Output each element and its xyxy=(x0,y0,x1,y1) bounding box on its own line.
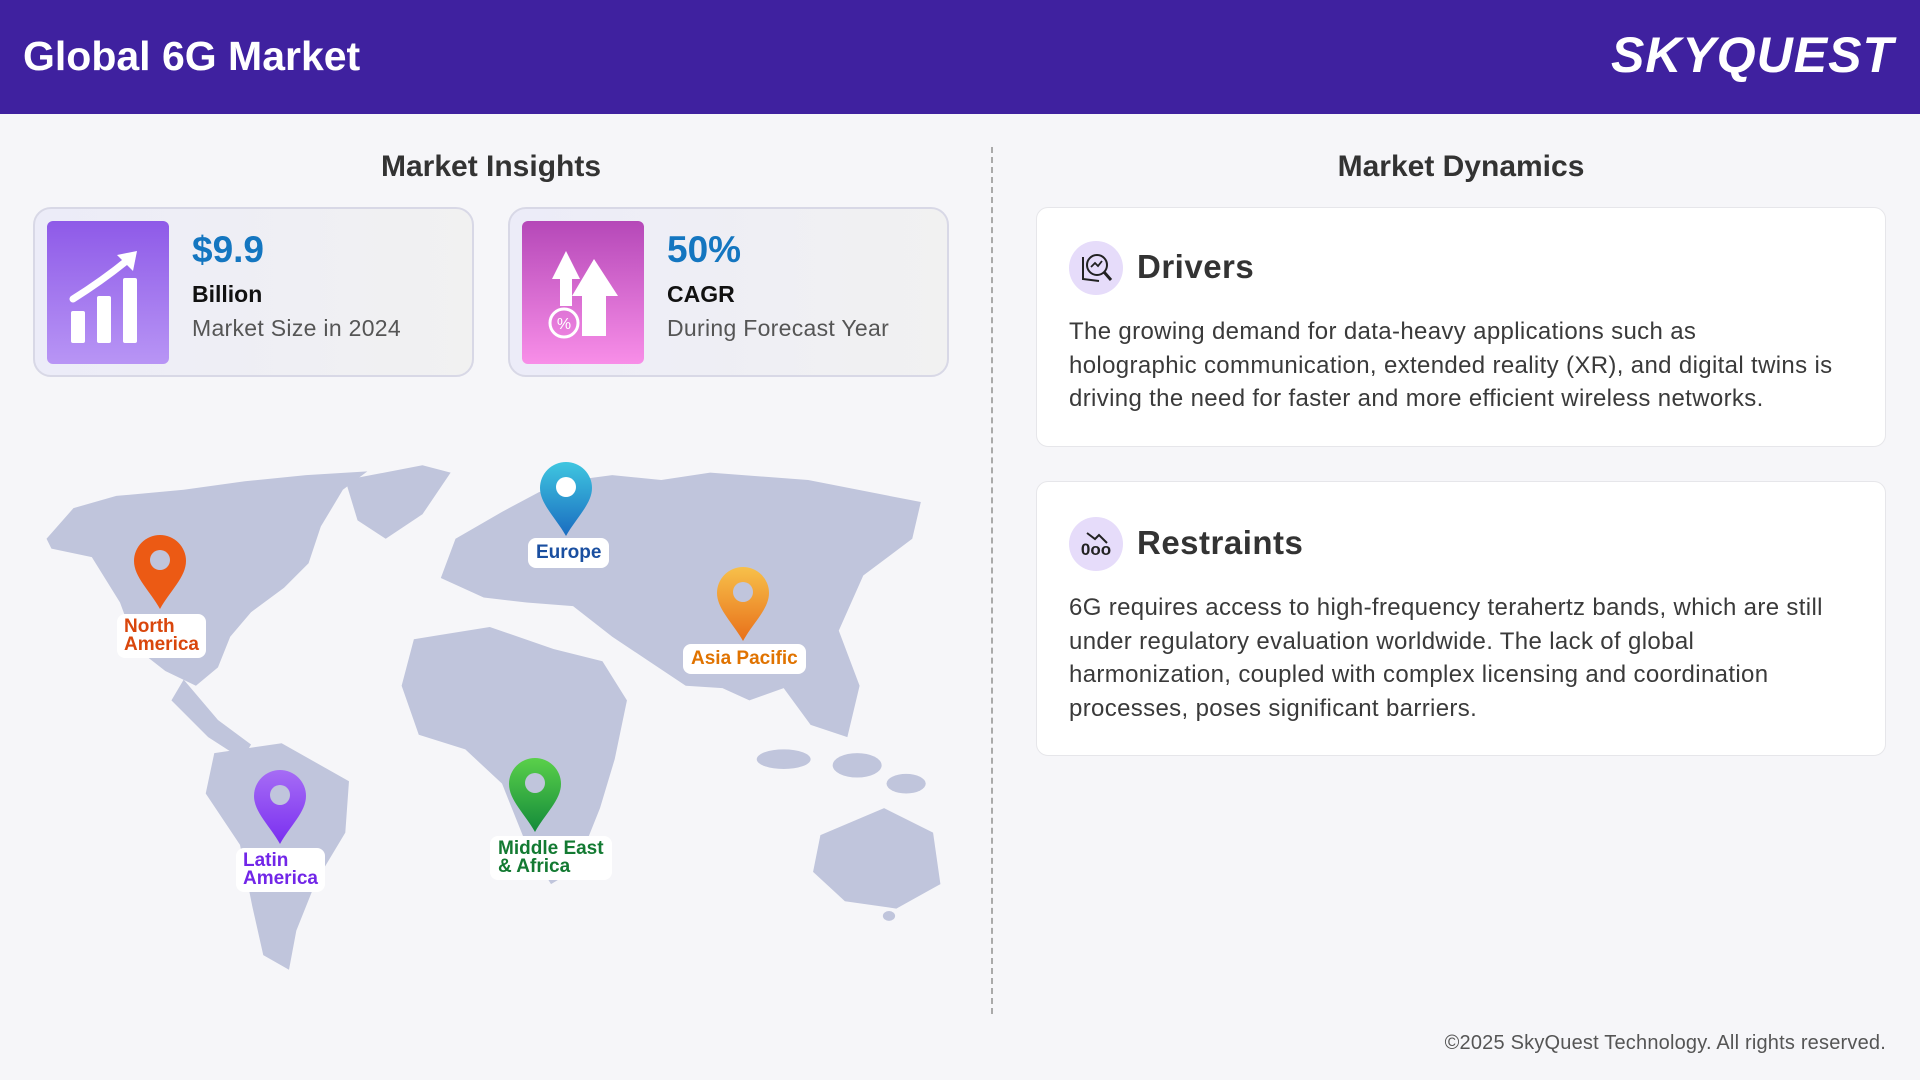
label: Europe: Europe xyxy=(536,542,601,563)
label: Europe xyxy=(528,538,609,568)
panel: drivers: Drivers xyxy=(1137,248,1254,285)
header bar xyxy=(0,0,1920,114)
panel: restraints: 6G requires access to high-frequency terahertz bands, which are still xyxy=(1069,594,1823,621)
heading: market insights: Market Insights xyxy=(381,150,601,183)
panel: restraints: harmonization, coupled with complex licensing and coordination xyxy=(1069,661,1768,688)
label: North America xyxy=(117,614,206,658)
label: Asia Pacific xyxy=(683,644,806,674)
panel: drivers: The growing demand for data-heavy applications such as xyxy=(1069,318,1696,345)
label: Latin America xyxy=(236,848,325,892)
label: Latin America: America xyxy=(243,868,318,889)
card: CAGR: CAGR xyxy=(667,281,735,307)
card: CAGR xyxy=(508,207,949,377)
panel: restraints: under regulatory evaluation worldwide. The lack of global xyxy=(1069,628,1694,654)
panel: drivers: holographic communication, extended reality (XR), and digital twins is xyxy=(1069,352,1833,378)
panel: restraints: Restraints xyxy=(1137,524,1303,561)
label: Middle East & Africa xyxy=(490,836,612,880)
pin: Middle East & Africa xyxy=(509,758,561,832)
label: North America: North xyxy=(124,616,175,637)
card: market size: Billion xyxy=(192,281,262,307)
title: Global 6G Market xyxy=(23,33,360,79)
card: market size: Market Size in 2024 xyxy=(192,315,401,341)
heading: market dynamics: Market Dynamics xyxy=(1338,150,1584,183)
label: Asia Pacific: Asia Pacific xyxy=(691,648,798,669)
icon: arrows xyxy=(522,221,644,364)
icon: restraints xyxy=(1069,517,1123,571)
icon: growth chart xyxy=(47,221,169,364)
card: CAGR: 50% xyxy=(667,229,741,270)
logo: SKYQUEST xyxy=(1611,27,1894,83)
icon: restraints: 0oo xyxy=(1081,540,1111,559)
icon: drivers xyxy=(1069,241,1123,295)
label: Middle East & Africa: & Africa xyxy=(498,856,570,877)
pin: Asia Pacific xyxy=(717,567,769,641)
card: market size xyxy=(33,207,474,377)
label: North America: America xyxy=(124,634,199,655)
icon: arrows: % xyxy=(557,316,571,333)
pin: Europe xyxy=(540,462,592,536)
pin: Latin America xyxy=(254,770,306,844)
divider xyxy=(991,147,993,1014)
panel: restraints: processes, poses significant barriers. xyxy=(1069,694,1477,722)
value: $9.9 xyxy=(192,229,264,270)
card: CAGR: During Forecast Year xyxy=(667,315,889,341)
label: Middle East & Africa: Middle East xyxy=(498,838,604,859)
panel: drivers xyxy=(1036,207,1886,447)
pin: North America xyxy=(134,535,186,609)
panel: restraints xyxy=(1036,481,1886,756)
footer: ©2025 SkyQuest Technology. All rights reserved. xyxy=(1445,1032,1886,1054)
panel: drivers: driving the need for faster and more efficient wireless networks. xyxy=(1069,385,1764,412)
label: Latin America: Latin xyxy=(243,850,288,871)
